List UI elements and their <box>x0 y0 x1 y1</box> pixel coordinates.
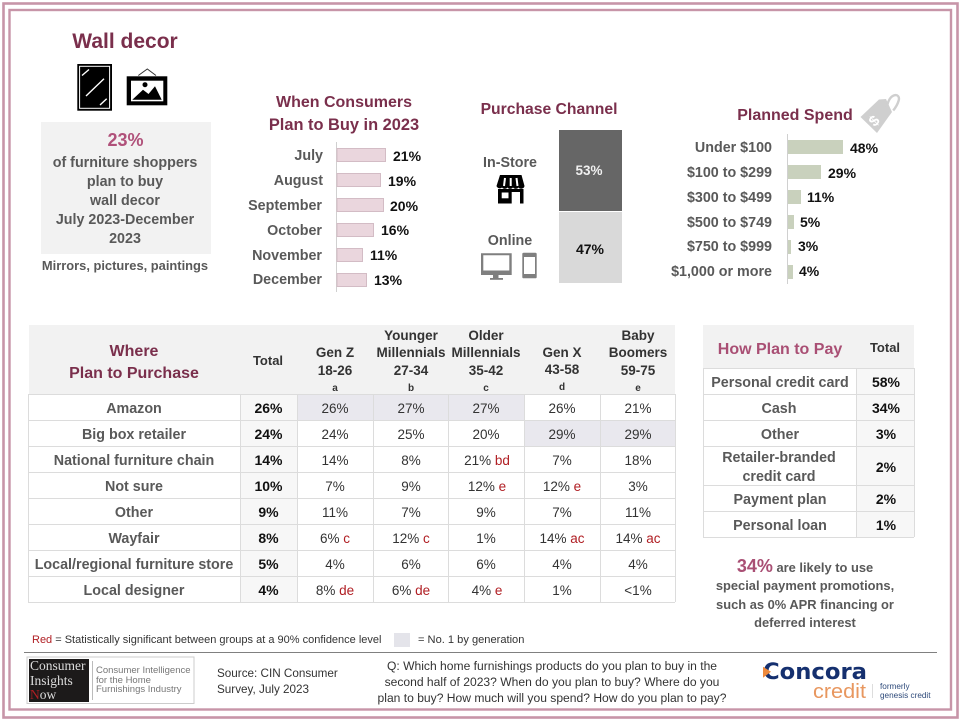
icon: framed picture <box>127 69 167 105</box>
table header: e <box>635 383 641 394</box>
bar chart: planned spend: $1,000 or more <box>671 264 772 280</box>
table header: Gen Z <box>316 345 354 360</box>
bar chart: when consumers plan to buy: 19% <box>388 173 417 189</box>
logo: concora credit: genesis credit <box>880 691 931 700</box>
table: how plan to pay: Personal loan <box>733 518 827 534</box>
callout: special payment promotions: deferred interest <box>754 615 857 630</box>
older millennials column: 1% <box>476 531 496 546</box>
stacked bar: purchase channel: 53% <box>575 163 603 178</box>
gen z column: 26% <box>321 401 349 416</box>
logo: concora credit <box>763 660 931 703</box>
bar chart: planned spend: Under $100 <box>695 140 772 156</box>
total column <box>254 400 283 598</box>
logo: consumer insights now <box>27 657 194 704</box>
total column: 9% <box>258 504 279 520</box>
row labels <box>35 401 233 599</box>
caption: wall decor products: Mirrors, pictures, paintings <box>42 258 208 273</box>
callout: 23 percent: wall decor <box>89 193 160 209</box>
logo: consumer insights now: Insights <box>30 673 73 688</box>
baby boomers column: <1% <box>624 583 652 598</box>
bar chart: planned spend: $750 to $999 <box>687 239 772 255</box>
gen x column: 12% e <box>543 479 581 494</box>
table header: Millennials <box>376 345 446 360</box>
table: how plan to pay: Cash <box>762 401 796 417</box>
total column: 26% <box>254 400 283 416</box>
baby boomers column: 18% <box>624 453 652 468</box>
callout: 23 percent: July 2023-December <box>56 212 195 228</box>
gen z column: 14% <box>321 453 349 468</box>
legend: statistical significance: Red = Statistically significant between groups at a 90% confidence level <box>32 634 381 646</box>
total column: 5% <box>258 556 279 572</box>
younger millennials column: 25% <box>397 427 425 442</box>
older millennials column <box>464 401 510 598</box>
row labels: Local/regional furniture store <box>35 557 233 573</box>
row labels: Amazon <box>106 401 162 417</box>
baby boomers column: 4% <box>628 557 648 572</box>
row labels: National furniture chain <box>54 453 214 469</box>
gen x column: 7% <box>552 505 572 520</box>
table header: Boomers <box>609 345 667 360</box>
bar chart: when consumers plan to buy: August <box>274 173 323 189</box>
bar chart: planned spend: 11% <box>807 189 835 205</box>
row labels: Other <box>115 505 153 521</box>
bar chart: when consumers plan to buy: July <box>294 148 323 164</box>
bar chart: planned spend <box>671 134 879 284</box>
table: how plan to pay: 3% <box>876 426 897 442</box>
table header: a <box>332 383 338 394</box>
bar chart: when consumers plan to buy: September <box>248 198 322 214</box>
callout: special payment promotions: special payment promotions, <box>716 578 894 593</box>
table: how plan to pay: How Plan to Pay <box>718 341 842 358</box>
table header: c <box>483 383 489 394</box>
table grid <box>28 394 676 602</box>
callout: special payment promotions <box>716 556 894 630</box>
gen z column: 24% <box>321 427 349 442</box>
row labels: Not sure <box>105 479 163 495</box>
bar chart: planned spend: $300 to $499 <box>687 190 772 206</box>
bar chart: when consumers plan to buy: 13% <box>374 272 403 288</box>
baby boomers column: 29% <box>624 427 652 442</box>
table header: Millennials <box>451 345 521 360</box>
bar chart: when consumers plan to buy: 16% <box>381 222 410 238</box>
table header: Total <box>253 353 283 368</box>
bar chart: when consumers plan to buy: October <box>267 223 322 239</box>
total column: 14% <box>254 452 283 468</box>
table: how plan to pay: 1% <box>876 517 897 533</box>
icon: desktop and phone <box>481 253 537 280</box>
table header: b <box>408 383 414 394</box>
table header: Where <box>110 343 159 360</box>
baby boomers column: 11% <box>625 505 651 520</box>
gen z column: 8% de <box>316 583 354 598</box>
icon: store <box>496 175 524 204</box>
row labels: Local designer <box>84 583 185 599</box>
table header: Younger <box>384 328 439 343</box>
gen z column: 4% <box>325 557 345 572</box>
total column: 4% <box>258 582 279 598</box>
younger millennials column: 12% c <box>392 531 430 546</box>
table header: Gen X <box>542 345 582 360</box>
bar chart: planned spend: $100 to $299 <box>687 165 772 181</box>
bar chart: when consumers plan to buy <box>248 142 422 292</box>
icon: price tag <box>860 95 899 133</box>
gen x column: 14% ac <box>539 531 585 546</box>
older millennials column: 21% bd <box>464 453 510 468</box>
stacked bar: purchase channel <box>559 130 622 283</box>
survey question note: Q: Which home furnishings products do you plan to buy in the <box>387 659 717 673</box>
source note: Source: CIN Consumer <box>217 667 338 680</box>
table header: 35-42 <box>469 363 503 378</box>
bar chart: when consumers plan to buy: 20% <box>390 198 419 214</box>
logo: concora credit: formerly <box>880 682 910 691</box>
older millennials column: 4% e <box>472 583 502 598</box>
table highlights <box>240 394 675 602</box>
table: how plan to pay: 58% <box>872 374 901 390</box>
table header: 59-75 <box>621 363 656 378</box>
logo: consumer insights now: Consumer Intelligence <box>96 665 191 676</box>
channel label: in-store: In-Store <box>483 155 537 171</box>
gen x column: 1% <box>552 583 572 598</box>
table: how plan to pay: Retailer-branded <box>722 450 836 466</box>
gen x column: 26% <box>548 401 576 416</box>
table: how plan to pay: Payment plan <box>734 492 826 508</box>
logo: consumer insights now: Furnishings Industry <box>96 684 182 695</box>
baby boomers column: 14% ac <box>615 531 661 546</box>
table: how plan to pay: 34% <box>872 400 901 416</box>
source note: Survey, July 2023 <box>217 683 309 696</box>
table: how plan to pay: Other <box>761 427 799 443</box>
younger millennials column: 8% <box>401 453 421 468</box>
bar chart: planned spend: 5% <box>800 214 821 230</box>
legend: statistical significance: = No. 1 by generation <box>418 634 524 646</box>
title: Wall decor <box>72 30 178 53</box>
older millennials column: 9% <box>476 505 496 520</box>
callout: 23 percent: of furniture shoppers <box>53 155 197 171</box>
younger millennials column: 27% <box>397 401 425 416</box>
older millennials column: 6% <box>476 557 496 572</box>
table header: 27-34 <box>394 363 429 378</box>
survey question note: second half of 2023? When do you plan to buy? Where do you <box>385 675 719 689</box>
callout: 23 percent: plan to buy <box>87 174 163 190</box>
gen x column: 4% <box>552 557 572 572</box>
table: how plan to pay: 2% <box>876 459 897 475</box>
gen z column <box>316 401 354 598</box>
bar chart: when consumers plan to buy: December <box>253 272 322 288</box>
younger millennials column: 7% <box>401 505 421 520</box>
chart heading: planned spend: Planned Spend <box>737 107 853 124</box>
logo: consumer insights now: Now <box>30 687 56 702</box>
table header: 43-58 <box>545 362 580 377</box>
gen x column: 7% <box>552 453 572 468</box>
table header: d <box>559 382 565 393</box>
younger millennials column: 6% <box>401 557 421 572</box>
table: where plan to purchase <box>28 325 676 602</box>
bar chart: when consumers plan to buy: 21% <box>393 148 422 164</box>
table header: 18-26 <box>318 363 353 378</box>
table header <box>29 325 675 394</box>
chart heading: when consumers plan to buy: When Consumers <box>276 94 412 111</box>
gen x column <box>539 401 585 598</box>
logo: concora credit: Concora <box>763 660 867 685</box>
callout: 23 percent: 2023 <box>109 231 141 247</box>
younger millennials column <box>392 401 430 598</box>
logo: concora credit: credit <box>813 681 866 703</box>
total column: 8% <box>258 530 279 546</box>
baby boomers column: 3% <box>628 479 648 494</box>
gen z column: 6% c <box>320 531 350 546</box>
baby boomers column <box>615 401 661 598</box>
bar chart: planned spend: $500 to $749 <box>687 215 772 231</box>
row labels: Wayfair <box>108 531 160 547</box>
stacked bar: purchase channel: 47% <box>576 241 605 257</box>
younger millennials column: 9% <box>401 479 421 494</box>
table: how plan to pay: Total <box>870 340 900 355</box>
older millennials column: 27% <box>472 401 500 416</box>
icon: mirror <box>77 64 112 111</box>
bar chart: planned spend: 4% <box>799 263 820 279</box>
table: how plan to pay: credit card <box>742 469 816 485</box>
table header: Baby <box>621 328 655 343</box>
older millennials column: 20% <box>472 427 500 442</box>
table header: Older <box>468 328 504 343</box>
logo: consumer insights now: for the Home <box>96 675 151 686</box>
table header: Plan to Purchase <box>69 365 199 382</box>
younger millennials column: 6% de <box>392 583 430 598</box>
table: how plan to pay <box>703 325 914 538</box>
channel label: online: Online <box>488 233 532 249</box>
logo: consumer insights now: Consumer <box>30 658 86 673</box>
callout: special payment promotions: 34% are likely to use <box>737 556 873 576</box>
baby boomers column: 21% <box>624 401 652 416</box>
callout: special payment promotions: such as 0% APR financing or <box>716 597 894 612</box>
survey question note: plan to buy? How much will you spend? How do you plan to pay? <box>378 691 727 705</box>
callout: 23 percent: 23% <box>107 130 144 150</box>
gen z column: 11% <box>322 505 348 520</box>
survey question note <box>378 659 727 705</box>
gen z column: 7% <box>325 479 345 494</box>
bar chart: planned spend: 48% <box>850 140 879 156</box>
chart heading: when consumers plan to buy: Plan to Buy in 2023 <box>269 116 419 134</box>
callout: 23 percent <box>41 122 211 254</box>
gen x column: 29% <box>548 427 576 442</box>
legend: statistical significance <box>32 633 524 647</box>
bar chart: planned spend: 3% <box>798 238 819 254</box>
chart heading: purchase channel: Purchase Channel <box>481 101 617 118</box>
bar chart: planned spend: 29% <box>828 165 857 181</box>
table: how plan to pay: Personal credit card <box>711 375 849 391</box>
older millennials column: 12% e <box>468 479 506 494</box>
icon: price tag: $ <box>866 112 884 130</box>
total column: 10% <box>254 478 283 494</box>
total column: 24% <box>254 426 283 442</box>
table: how plan to pay: 2% <box>876 491 897 507</box>
bar chart: when consumers plan to buy: November <box>252 248 322 264</box>
bar chart: when consumers plan to buy: 11% <box>370 247 398 263</box>
row labels: Big box retailer <box>82 427 186 443</box>
